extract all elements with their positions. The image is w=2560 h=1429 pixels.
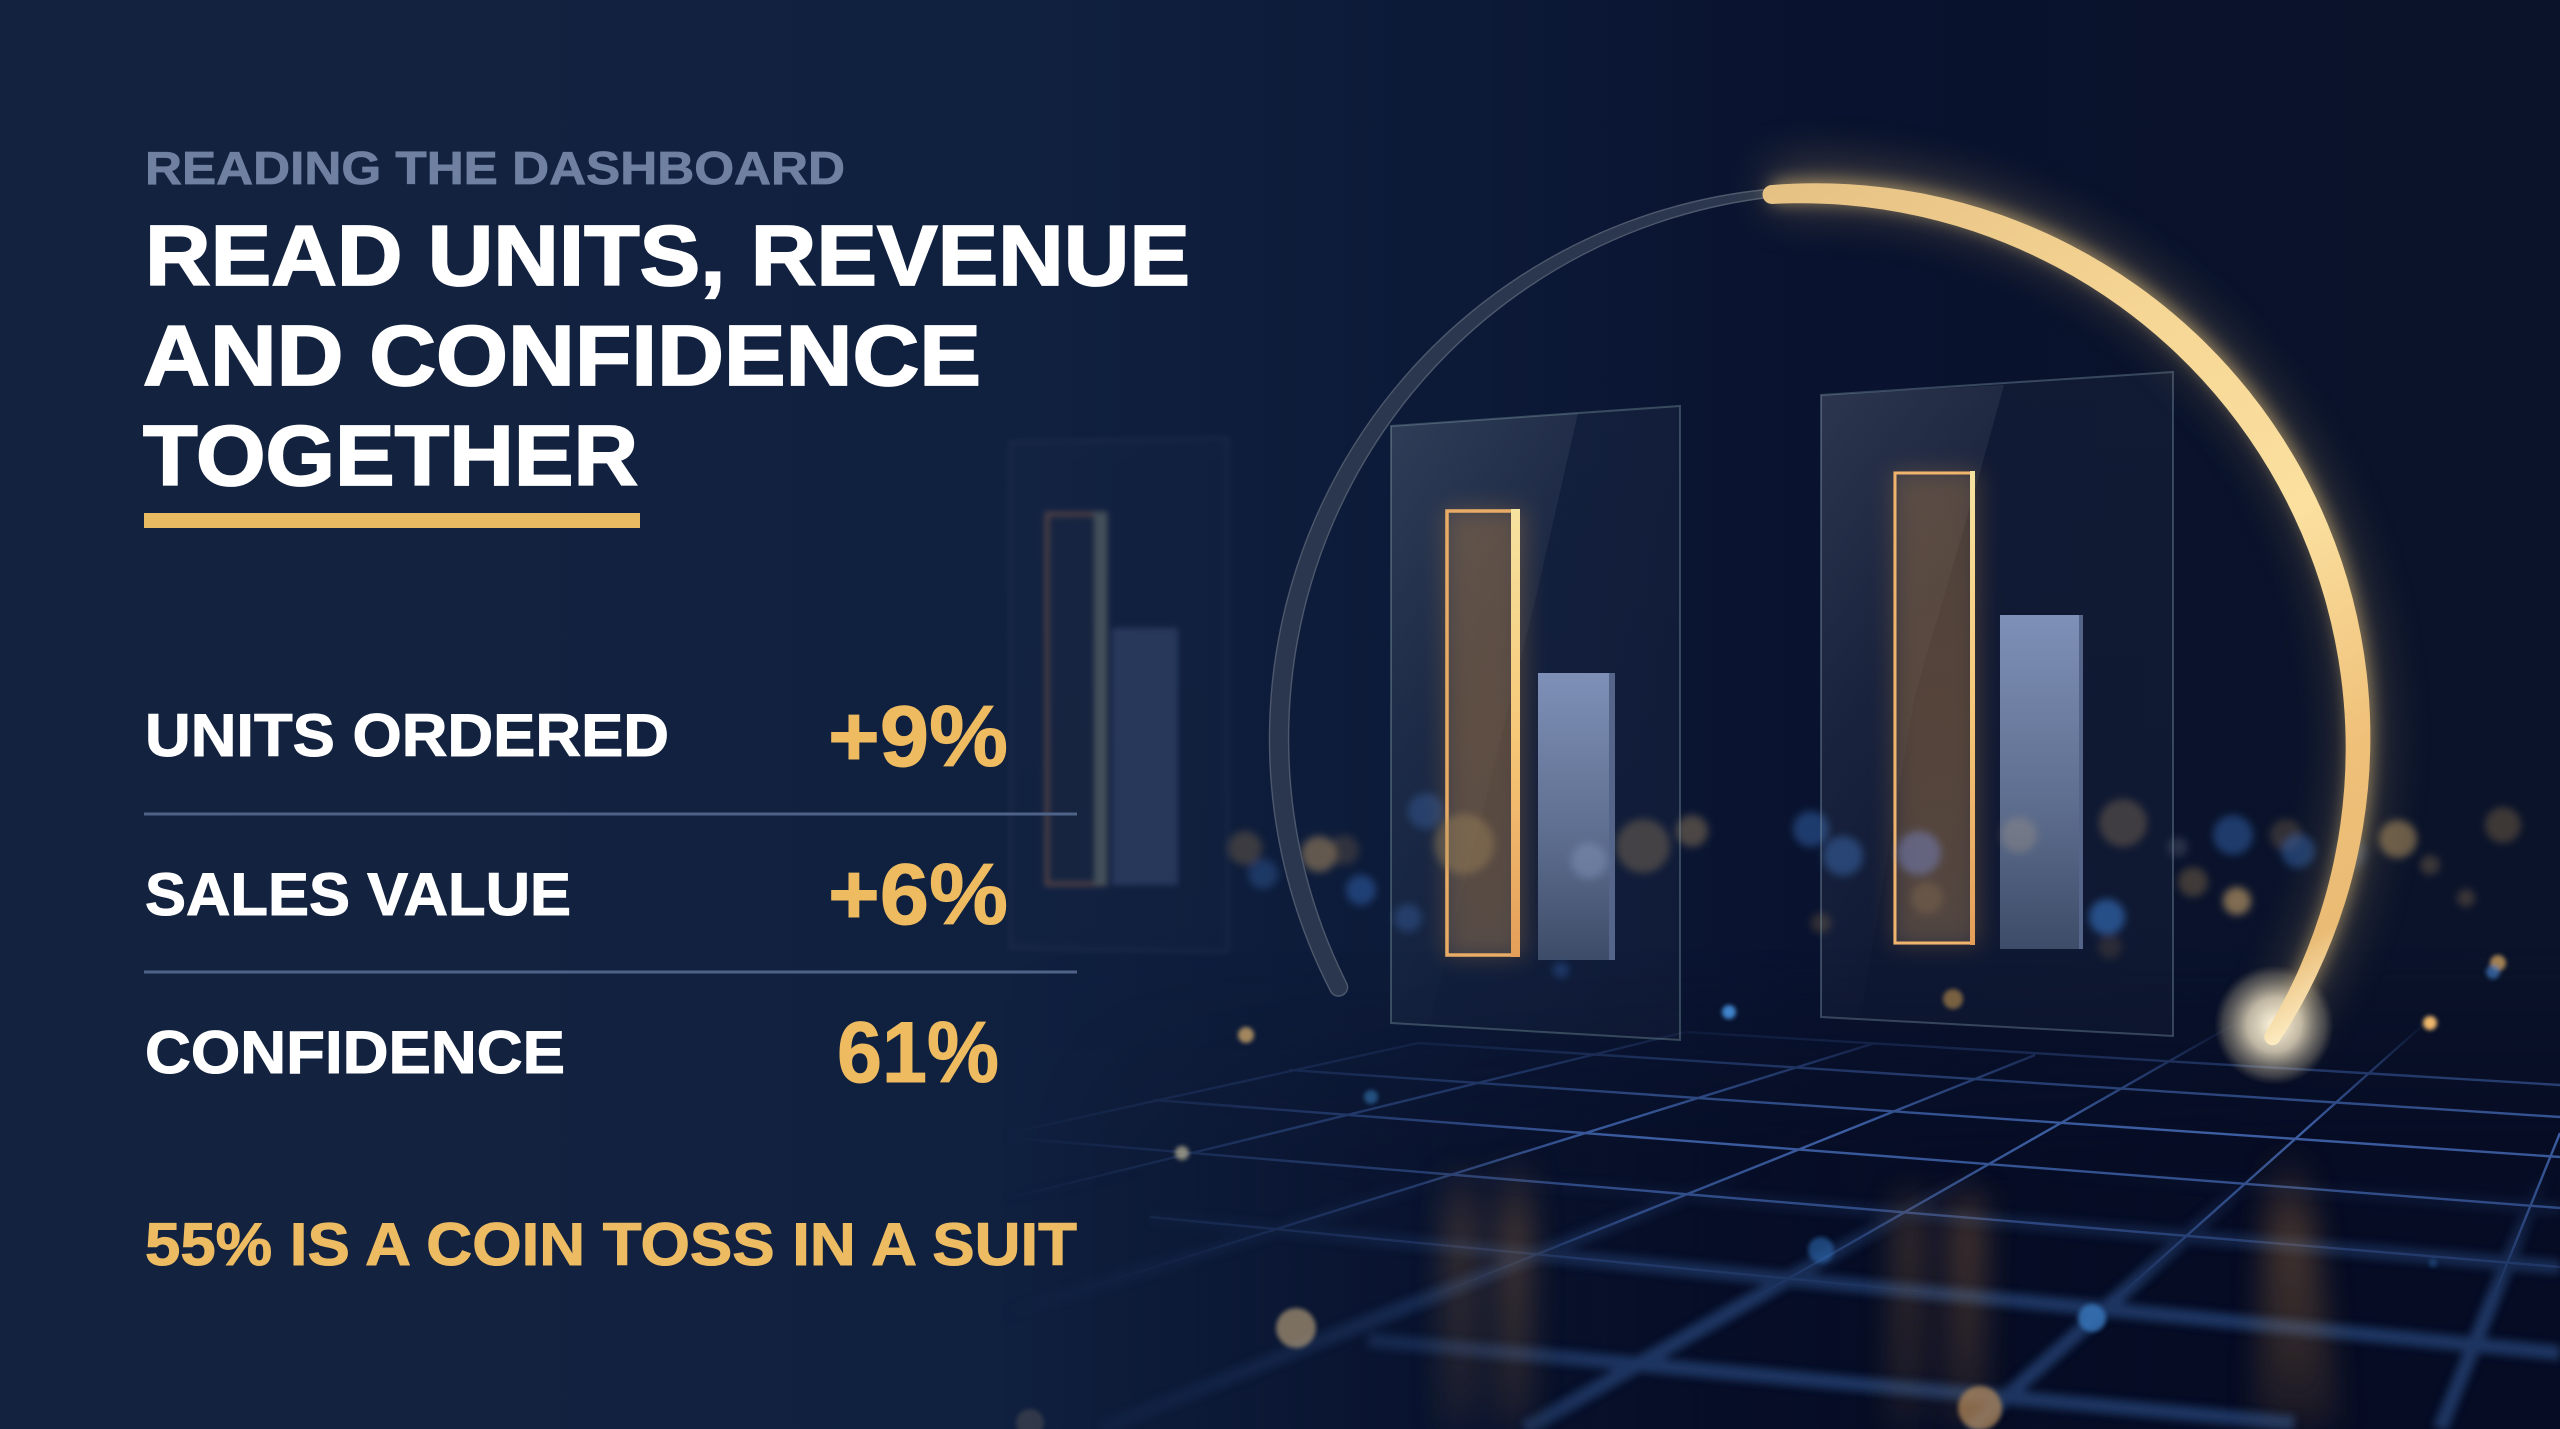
stat row: units ordered: UNITS ORDERED (145, 702, 669, 769)
stat row: confidence: 61% (837, 1005, 999, 1101)
stat row: units ordered (145, 689, 1008, 785)
left panel glass (1010, 438, 1228, 952)
title underline (144, 513, 640, 528)
tip glow (2214, 965, 2334, 1085)
stat row: confidence: CONFIDENCE (145, 1019, 565, 1086)
gauge gold progress arc (1762, 169, 2377, 1085)
right panel glass (1821, 372, 2173, 1036)
floor reflections (1440, 1150, 2340, 1429)
bokeh lights behind panels (1228, 793, 2521, 959)
bokeh lights in front of panels (1434, 814, 2037, 978)
closing callout: 55% IS A COIN TOSS IN A SUIT (145, 1211, 1077, 1278)
right panel orange bar (1893, 471, 1979, 945)
left panel blue bar (1112, 628, 1178, 885)
left panel orange bar (1047, 512, 1107, 885)
eyebrow heading: READING THE DASHBOARD (145, 142, 845, 194)
right panel blue bar (2000, 615, 2083, 949)
right panel sheen (1821, 385, 2004, 1017)
middle panel blue bar (1538, 673, 1615, 960)
middle panel glass (1391, 406, 1680, 1040)
right glass panel (1821, 372, 2173, 1036)
main title (143, 209, 1190, 504)
stat row: confidence (145, 1005, 999, 1101)
arc wide glow (1772, 169, 2377, 1046)
arc near glow (1772, 180, 2371, 1042)
main title: AND CONFIDENCE (143, 309, 981, 404)
perspective floor grid (1054, 1027, 2560, 1429)
stat row: sales value: SALES VALUE (145, 861, 571, 928)
middle panel orange bar (1445, 509, 1525, 957)
middle glass panel (1391, 406, 1680, 1040)
floating floor sparks (1016, 955, 2506, 1429)
background (1174, 0, 2560, 1429)
arc body (1762, 183, 2370, 1045)
left faint panel with bars (1010, 438, 1228, 952)
main title: READ UNITS, REVENUE (145, 209, 1190, 304)
stat row: sales value (145, 847, 1008, 943)
stat row: units ordered: +9% (828, 689, 1008, 785)
stat row: sales value: +6% (828, 847, 1008, 943)
gauge track arc (1269, 189, 1772, 996)
main title: TOGETHER (143, 409, 638, 504)
middle panel sheen (1391, 413, 1578, 1023)
